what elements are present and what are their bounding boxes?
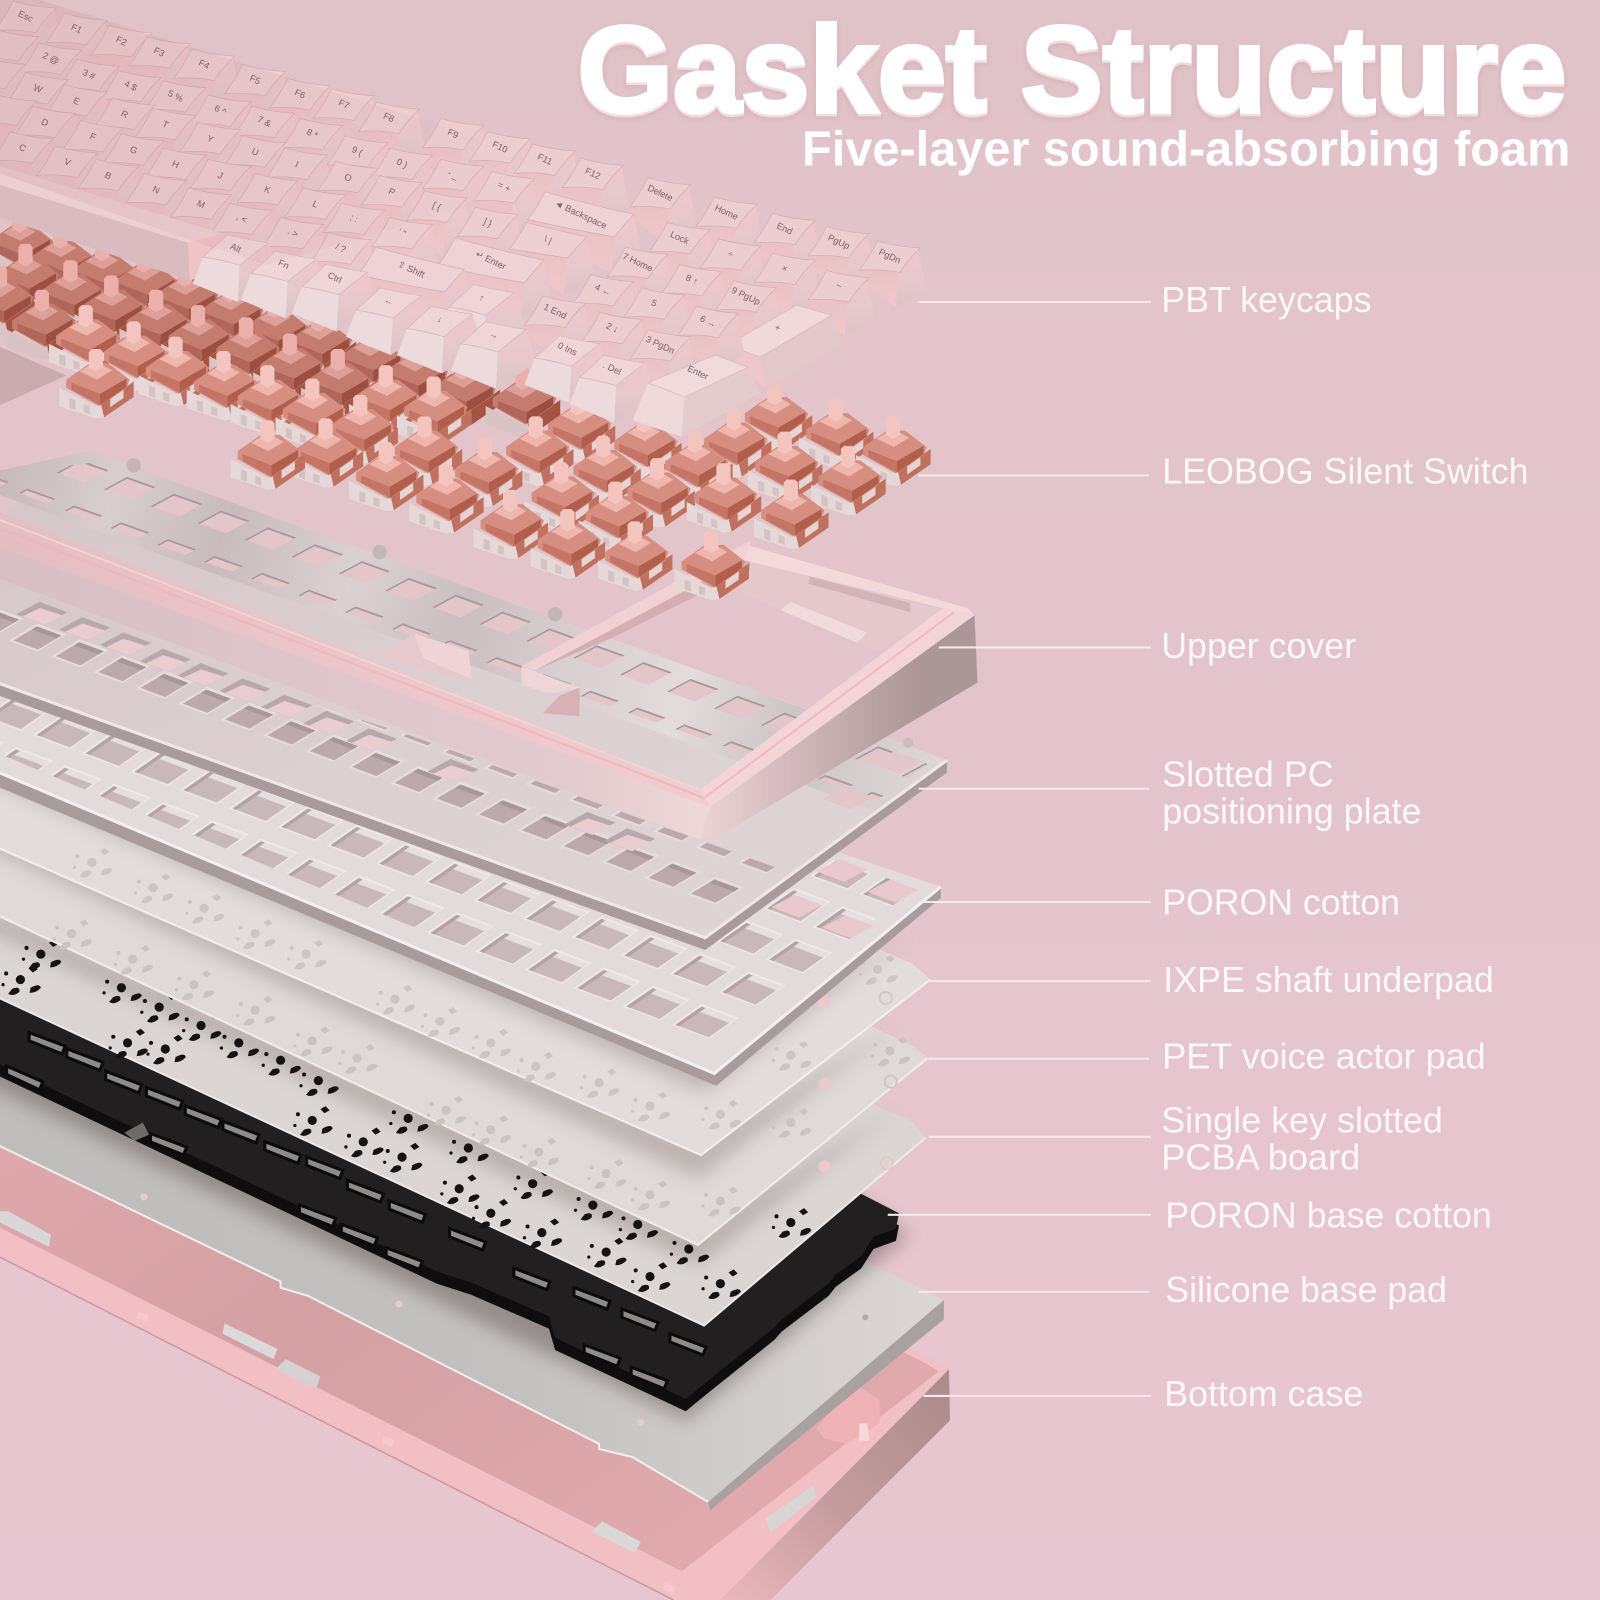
keycap legends: 8 ↑ [684,273,700,287]
layer: LEOBOG silent switches [0,210,931,600]
callout: PBT keycaps: PBT keycaps [1161,280,1371,320]
layer: upper cover [0,500,978,840]
keycap legends: Fn [277,258,291,271]
keycap legends: E [72,95,81,107]
keycap legends: I [294,159,300,169]
layer: IXPE shaft underpad [0,510,931,1155]
keycap legends: F9 [446,127,460,141]
layer: silicone base pad [0,790,944,1510]
keycap legends: F10 [491,139,509,155]
layer: slotted PC positioning plate [0,451,947,950]
subtitle: Five-layer sound-absorbing foam [802,122,1570,176]
IXPE cut-outs [73,848,898,1130]
keycap legends: F4 [197,58,211,71]
keycap legends: ◄ Backspace [553,198,608,231]
keycap legends: ' " [397,227,408,239]
keycap legends: O [343,172,353,184]
keycap legends: Home [713,203,740,222]
keycap legends [16,9,902,382]
keycap legends: 0 Ins [556,340,579,358]
PET cut-outs [52,919,910,1216]
keycap legends: ] } [482,216,494,229]
keycap legends: + [773,322,782,333]
keycap legends: / ? [334,241,348,255]
keycap legends: 5 % [166,88,185,104]
keycap legends: 2 @ [41,50,61,66]
keycap legends: Lock [669,229,691,247]
callout: Slotted PC positioning plate: Slotted PC [1162,755,1334,795]
keycap legends: 6 ^ [213,103,229,117]
keycap legends: F2 [114,34,128,48]
callout: Silicone base pad: Silicone base pad [1165,1270,1447,1310]
exploded keyboard illustration [0,0,978,1600]
keycap legends: Enter [686,363,710,382]
keycap back shading [0,0,480,265]
keycap legends: T [161,119,170,130]
keycap legends: N [151,184,161,196]
keycap legends: F8 [382,111,396,124]
callout: Slotted PC positioning plate: positioning plate [1162,791,1421,831]
keycap legends: 4 $ [123,79,139,93]
keycap legends: , < [235,212,249,225]
callout: Upper cover: Upper cover [1161,626,1356,666]
left case fragment behind switches [0,347,66,405]
keycap legends: 5 [650,298,659,309]
layer: PORON base cotton [0,980,899,1411]
keycap legends: F6 [293,87,307,101]
callout: IXPE shaft underpad: IXPE shaft underpad [1163,960,1494,1000]
keycap legends: B [103,170,113,181]
keycap legends: W [32,82,44,95]
keycap legends: 0 ) [395,157,409,170]
callout: Single key slotted PCBA board: Single key slotted [1161,1101,1443,1141]
layer: PET voice actor pad [0,571,928,1245]
keycap legends: − [834,280,843,291]
keycap legends: Delete [646,183,674,203]
keycap legends: \ | [542,234,553,246]
keycap legends: PgDn [877,247,902,266]
callout: LEOBOG Silent Switch: LEOBOG Silent Switch [1162,452,1529,492]
keycap legends: PgUp [826,233,851,251]
keycap legends: P [387,186,397,198]
keycap legends: F7 [337,97,351,111]
callout: Slotted PC positioning plate [918,755,1421,831]
key: space bar [0,163,227,281]
keycap legends: H [170,158,181,170]
keycap legends: . Del [602,360,623,377]
keycap legends: J [216,170,225,181]
keycap legends: G [128,144,139,156]
keycap legends: L [311,199,320,210]
keycap legends: D [40,116,50,129]
layer: PORON cotton [0,663,941,1086]
keycap legends: M [195,198,207,210]
keycap legends: 7 Home [621,251,654,274]
keycap legends: ; : [348,212,360,225]
callout: Bottom case: Bottom case [1164,1374,1363,1414]
keycap legends: 3 # [81,67,98,82]
keycap legends: F [88,131,98,143]
layer: PBT keycaps [0,1,927,437]
keycap legends: ↓ [436,314,444,325]
keycap legends: Alt [229,241,243,255]
keycap legends: ↵ Enter [474,249,508,272]
keycap legends: → [488,328,500,341]
keycap legends: . > [286,226,300,239]
keycap legends: F11 [536,152,554,167]
layer: single key slotted PCBA board [0,653,926,1326]
title: Gasket Structure [578,3,1566,140]
keycap legends: 7 & [256,114,273,129]
keycap legends: C [17,142,28,154]
keycap legends: Ctrl [326,270,343,285]
keycap legends: × [780,263,789,274]
callout: Single key slotted PCBA board: PCBA board [1161,1137,1360,1177]
keycap legends: 4 ← [593,282,613,298]
black through-holes [1,940,811,1299]
keycap legends: F5 [248,73,262,86]
keycap legends: ↑ [477,293,486,304]
keycap legends: F1 [70,22,84,35]
keycap legends: Y [205,133,215,145]
keycap legends: 2 ↓ [605,320,620,335]
keycap legends: - _ [446,168,461,182]
keycap legends: U [250,146,260,158]
title: Gasket Structure [578,1,1566,138]
keycap legends: ÷ [726,249,735,260]
keycap legends: Esc [16,9,35,24]
keycap legends: V [62,156,73,168]
keycap legends: 6 → [698,313,718,330]
shadow under foam [0,1020,908,1420]
keycap legends: K [262,184,273,196]
title: Gasket Structure [578,4,1566,141]
keycap legends: ⇧ Shift [396,259,427,280]
first row of pink windows [16,602,655,851]
keycap legends: F12 [584,166,602,181]
foam slots [8,1035,704,1387]
keycap legends: 9 ( [350,144,364,158]
layer: bottom case [0,867,950,1600]
keycap legends: ← [383,295,395,308]
callout: PORON base cotton: PORON base cotton [1165,1196,1492,1236]
callout: PET voice actor pad: PET voice actor pad [1162,1036,1486,1076]
keycap legends: 3 PgDn [644,334,676,356]
keycap legends: = + [496,179,512,194]
keycap legends: R [119,108,130,120]
keycap legends: 1 End [542,302,568,321]
callout: PORON cotton: PORON cotton [1162,882,1400,922]
keycap legends: [ { [431,200,443,212]
callout: Single key slotted PCBA board [929,1101,1443,1177]
keycap legends: 8 * [305,127,320,141]
keycap legends: 9 PgUp [730,285,762,307]
keycap legends: F3 [152,45,166,59]
keycap legends: End [775,221,794,237]
